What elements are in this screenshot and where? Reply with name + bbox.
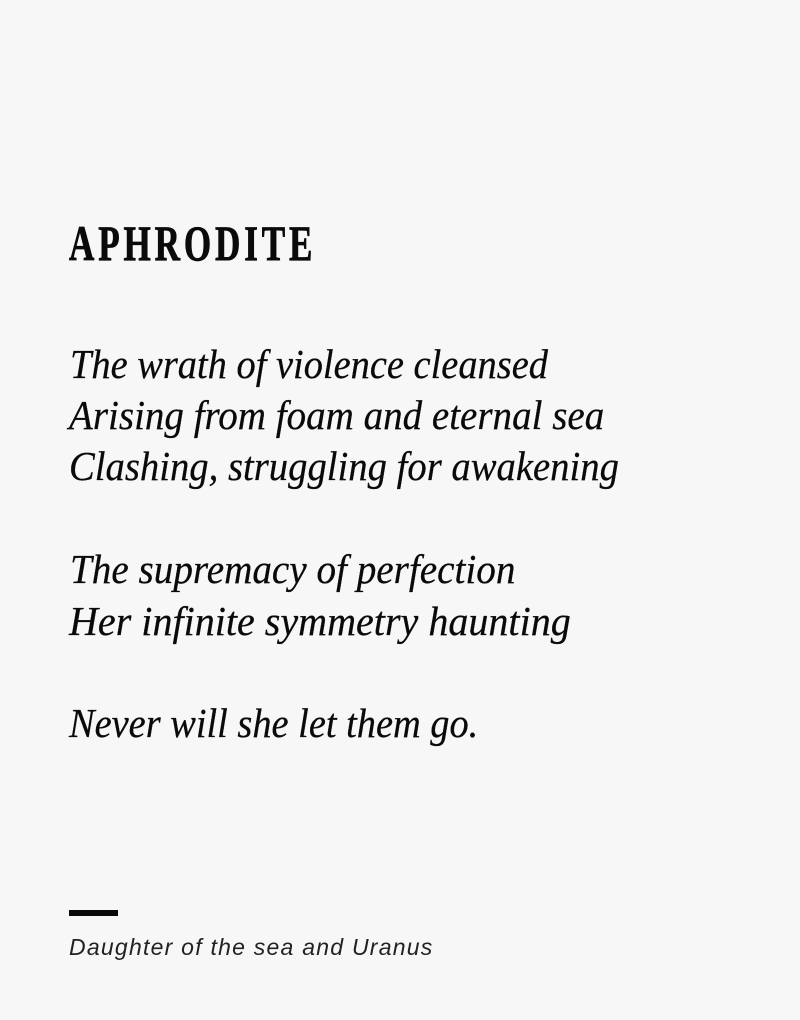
poem line 5: Her infinite symmetry haunting xyxy=(69,598,571,644)
poem line 1: The wrath of violence cleansed xyxy=(70,341,548,387)
title: APHRODITE xyxy=(69,215,316,271)
poem line 3: Clashing, struggling for awakening xyxy=(69,443,619,489)
caption: Daughter of the sea and Uranus xyxy=(69,934,434,960)
poem line 2: Arising from foam and eternal sea xyxy=(69,392,604,438)
poem line 4: The supremacy of perfection xyxy=(70,546,515,592)
accent bar xyxy=(69,910,118,916)
poem line 6: Never will she let them go. xyxy=(69,700,478,746)
